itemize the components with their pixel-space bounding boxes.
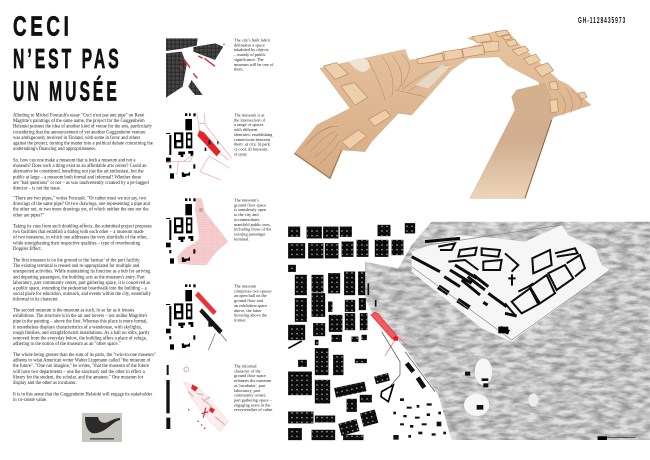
essay text: undertaking's financing and appropriateness. [13, 147, 96, 152]
caption: intersection of spaces [234, 112, 273, 156]
essay text: will have two departments – one the sanctuary and the other in effect a [13, 370, 145, 375]
caption: informal ground floor plan: ground floor space [234, 373, 266, 378]
essay text: other are pipes?" [13, 213, 44, 218]
caption: intersection of spaces: identities, establishing [234, 132, 273, 138]
map: suburban houses [393, 398, 446, 440]
title [13, 11, 122, 107]
map: scale bar [598, 436, 635, 440]
caption: informal ground floor plan: engaging users in the [234, 402, 270, 407]
essay text: The existing terminal is reused and re-appropriated for multiple and [13, 264, 140, 269]
essay text: the other not, or two more drawings yet, of which neither the one nor the [13, 208, 149, 213]
caption: informal ground floor plan: reframes the museum [234, 378, 272, 383]
essay text: adheres to what American writer Walter Lippmann called "the museum of [13, 359, 151, 364]
caption: two spaces: an exhibition space [234, 303, 267, 308]
caption: informal ground floor plan: laboratory, part [234, 388, 261, 394]
caption: city fabric: inhabited by objects [234, 47, 269, 52]
essay text: are "bad questions" or not – as was inadvertently croaked by a jet-lagged [13, 181, 149, 186]
essay text: pipe in the painting – above the first. Whereas this place is more formal, [13, 320, 148, 325]
essay text: removed from the everyday below, the building offers a place of refuge, [13, 336, 147, 342]
caption: city fabric: – mainly of public [233, 52, 266, 57]
essay text: Magritte's paintings of the same name, the project for the Guggenheim [13, 119, 145, 124]
essay text: Taking its cues from such doubling-effects, the submitted project proposes [13, 224, 152, 230]
essay text: adhering to the notion of the museum as an "other space." [13, 342, 121, 347]
essay text: drawings of the same pipe? Or two drawings, one representing a pipe and [13, 202, 151, 207]
caption: city fabric: museum will be one of [234, 62, 274, 67]
caption: ground floor open space: including those of the [234, 227, 271, 232]
title: N’EST PAS [13, 43, 122, 74]
essay text: The second museum is the museum as such, in so far as it houses [13, 308, 134, 314]
caption: two spaces: above, the latter [234, 308, 262, 314]
map: city blocks west [288, 223, 415, 440]
title: CECI [13, 11, 72, 43]
essay text: rough finishes, and straightforward installations. As a hall on stilts, partly [13, 331, 150, 336]
wooden site model [294, 30, 591, 198]
essay text: So, how can one make a museum that is both a museum and not a [13, 158, 135, 164]
essay text: "There are two pipes," writes Foucault. "Or rather must we not say, two [13, 196, 147, 202]
essay text: library for the student, the scholar, and the amateur." One museum for [13, 375, 144, 380]
essay text: considering that the announcement of yet another Guggenheim venture [13, 130, 145, 135]
caption: intersection of spaces: them: a) city, b) park, [234, 142, 271, 148]
caption: intersection of spaces: a range of spaces [234, 122, 264, 127]
essay text: the future". "One can imagine," he writes, "that the museum of the future [13, 364, 149, 369]
essay text: unexpected activities. While maintaining its function as a hub for arriving [13, 270, 151, 275]
caption: informal ground floor plan: The informal [234, 364, 257, 368]
essay text: a public space, extending the pedestrian boardwalk into the building – a [13, 286, 147, 292]
caption: ground floor open space: The museum's [234, 198, 259, 202]
caption: city fabric: delineates a space [234, 42, 265, 47]
caption: two spaces: ground floor and [234, 298, 264, 303]
essay text: alternative be considered, benefiting not just the art enthusiast, but the [13, 170, 144, 175]
caption: intersection of spaces: connections between [234, 137, 271, 142]
caption: ground floor open space [234, 198, 271, 241]
model: buildings [323, 30, 587, 149]
caption: informal ground floor plan: everyweather of value. [234, 407, 273, 412]
site plan map [288, 222, 650, 440]
essay text: while strengthening their respective qualities – type of reverberating [13, 241, 141, 246]
caption: informal ground floor plan: community center, [234, 393, 266, 399]
caption: intersection of spaces: c) cool, d) museum, [234, 146, 268, 152]
essay text: informal in its character. [13, 298, 59, 303]
map: quay [368, 283, 435, 392]
caption: ground floor open space: terminal. [234, 236, 249, 241]
caption: informal ground floor plan: character of the [234, 368, 261, 373]
essay text: exhibitions. The structure is in the air and hovers – not unlike Magritte's [13, 314, 148, 319]
caption: ground floor open space: manifold public uses, [234, 222, 271, 228]
caption: intersection of spaces: with different [234, 127, 258, 132]
caption: ground floor open space: accommodates [234, 217, 260, 222]
caption: intersection of spaces: the intersection of [234, 117, 266, 122]
essay text: of two museums, in which one addresses the very shortfalls of the other, [13, 236, 148, 241]
essay text: was ambiguously received in Finland, with some in favor and others [13, 136, 141, 141]
diagram: informal ground floor plan [166, 365, 228, 432]
caption: city fabric: them. [234, 67, 244, 72]
essay text: and departing passengers, the building acts as the museum's entry. Part [13, 275, 145, 280]
caption: informal ground floor plan: part gathering space – [234, 397, 273, 402]
diagram: intersection of spaces [166, 113, 232, 180]
caption: two spaces [234, 284, 272, 322]
essay text: Alluding to Michel Foucault's essay "Ceci n'est pas une pipe" on René [13, 114, 144, 118]
essay text: director – is not the issue. [13, 186, 61, 192]
essay text: it nonetheless displays characteristics of a warehouse, with skylights, [13, 325, 142, 330]
essay text: public at large – a museum both formal and informal? Whether these [13, 175, 141, 180]
caption: city fabric [233, 38, 274, 72]
essay text: Doppler Effect. [13, 247, 42, 252]
caption: two spaces: hovering above the [234, 313, 267, 318]
map: island blocks [412, 225, 610, 410]
caption: two spaces: an open hall on the [234, 293, 267, 298]
caption: ground floor open space: to the city and [234, 212, 259, 217]
essay text: Helsinki pursues the idea of another kind of venue for the arts, particularly [13, 125, 153, 130]
essay text: two facilities that establish a dialog with each other – a museum made [13, 230, 144, 235]
caption: ground floor open space: ground floor space [234, 202, 266, 207]
caption: ground floor open space: existing passenger [234, 231, 266, 236]
caption: two spaces: comprises two spaces: [234, 288, 272, 293]
caption: informal ground floor plan: as 'incubator', part [234, 383, 266, 389]
caption: intersection of spaces: e) quay. [234, 151, 248, 156]
caption: intersection of spaces: The museum is at [234, 112, 265, 118]
map: museum site in red [371, 312, 407, 356]
caption: city fabric: significance. The [234, 57, 264, 62]
map: sea [365, 222, 650, 440]
essay text: The whole being greater than the sum of its parts, the "twin-in-one museum" [13, 353, 156, 358]
essay text: It is in this sense that the Guggenheim Helsinki will engage its stakeholder [13, 392, 153, 398]
project code: GH-1128435973 [578, 17, 626, 25]
diagram: two spaces [166, 284, 227, 350]
caption: ground floor open space: is seamlessly open [234, 207, 267, 212]
caption: informal ground floor plan [234, 364, 273, 412]
model: contour lines [305, 53, 450, 163]
map: islands [412, 225, 610, 416]
essay text: against the project, turning the matter into a political debate concerning the [13, 142, 153, 146]
model: base with quay [294, 30, 591, 178]
diagram: ground floor open space [166, 198, 228, 265]
essay text: museum? Does such a thing exist as an affordable arts center? Could an [13, 164, 147, 169]
model: pier [470, 83, 557, 198]
caption: city fabric: The city's built fabric [234, 38, 271, 42]
essay text: laboratory, part community center, part gathering space, it is conceived as [13, 281, 150, 286]
essay text: social place for education, outreach, and events within the city, essentially [13, 292, 152, 297]
icon: Magritte pipe painting [82, 413, 122, 442]
essay text [13, 114, 156, 403]
caption: two spaces: former. [234, 317, 247, 322]
essay text: The first museum is on the ground or the 'tarmac' of the port facility. [13, 258, 140, 264]
essay text: display and the other as incubator. [13, 381, 77, 386]
diagram: city fabric [166, 38, 225, 98]
essay text: in co-create value. [13, 398, 47, 403]
title: UN MUSÉE [13, 76, 120, 107]
caption: two spaces: The museum [234, 284, 257, 288]
